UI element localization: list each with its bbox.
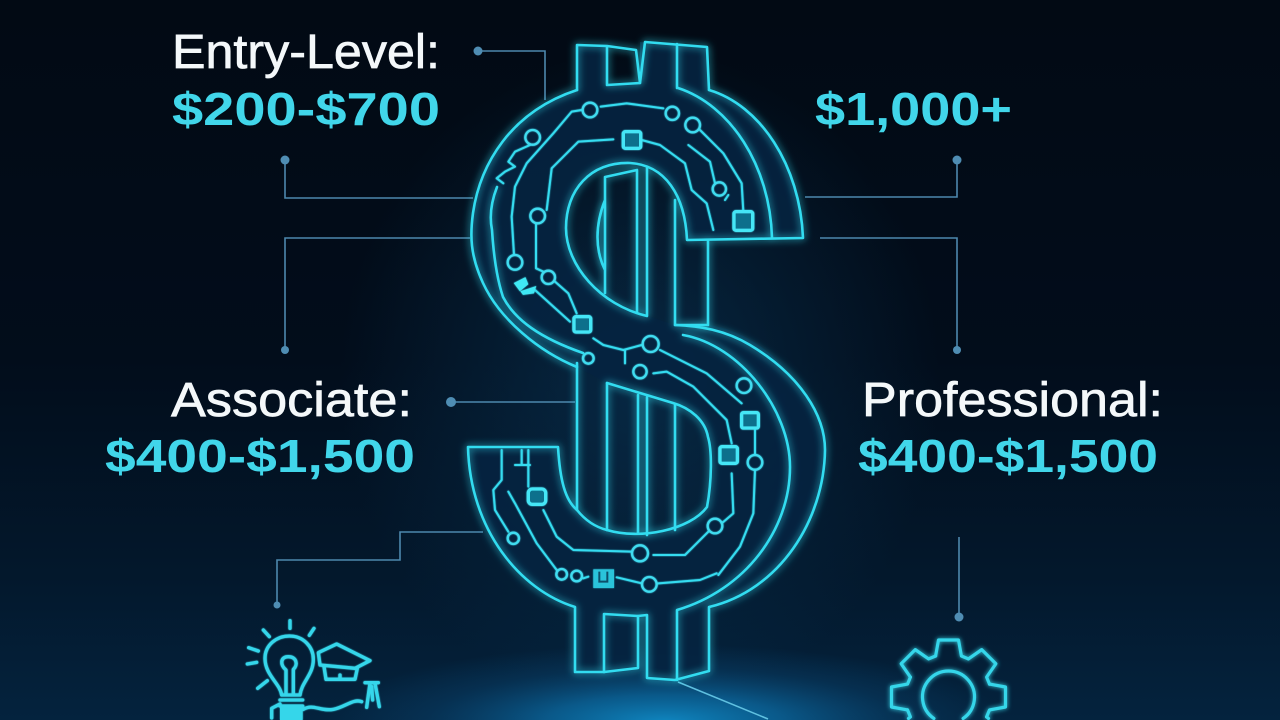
- label: associate: $400-$1,500: [105, 430, 415, 482]
- lower circuit traces: [493, 350, 762, 592]
- label: professional: [858, 374, 1163, 482]
- dollar sign circuit: [468, 42, 825, 680]
- label: entry-level: $200-$700: [172, 83, 440, 135]
- label: entry-level: [172, 26, 440, 135]
- background halo behind dollar sign: [340, 50, 940, 710]
- label: entry-level: Entry-Level:: [172, 26, 440, 79]
- label: professional: Professional:: [862, 374, 1163, 427]
- icon: gear: [892, 640, 1006, 718]
- centre and lower curve: [468, 325, 825, 680]
- connector lines: [274, 46, 964, 719]
- centre bars upper: [598, 168, 708, 325]
- upper circuit traces: [497, 103, 753, 364]
- label: top-right price: $1,000+: [815, 83, 1012, 135]
- label: associate: Associate:: [171, 374, 412, 427]
- dollar sign outline: [468, 42, 825, 680]
- label: professional: $400-$1,500: [858, 430, 1158, 482]
- upper curve: [566, 90, 803, 316]
- top bars: [577, 42, 709, 90]
- label: associate: [105, 374, 415, 482]
- floor glow: [325, 644, 1005, 720]
- icon: light bulb and graduation cap: [247, 621, 379, 720]
- dollar sign body fill: [468, 42, 825, 680]
